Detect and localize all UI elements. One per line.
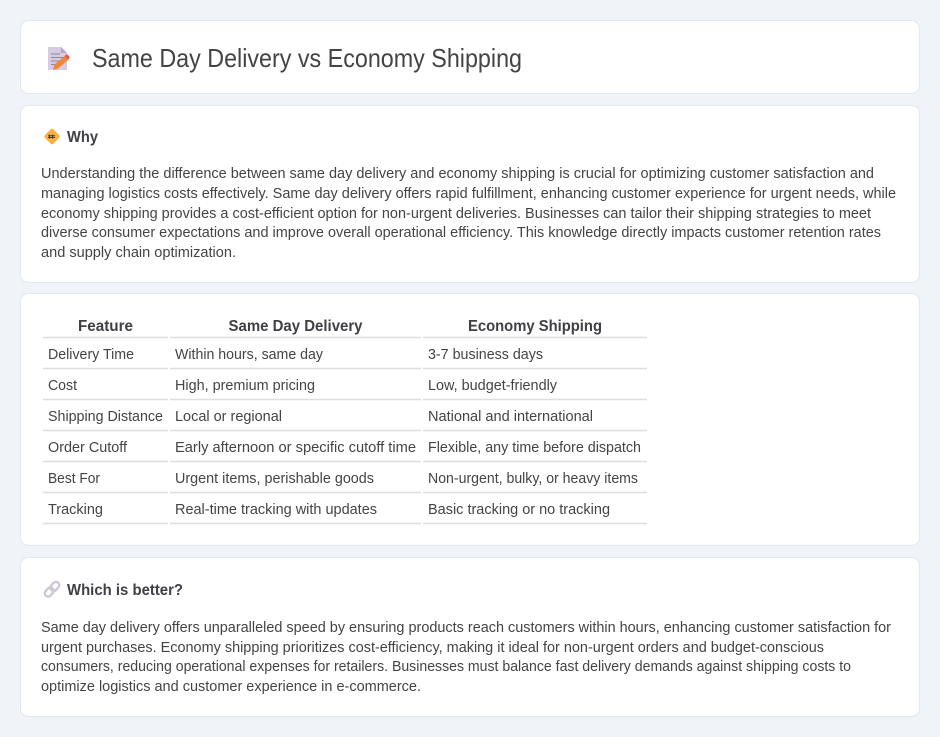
heading: why: Why <box>67 129 98 146</box>
text: why paragraph: managing logistics costs effectively. Same day delivery offers rapid fulfillment, enhancing customer experience for urgent needs, while <box>41 186 896 202</box>
table header: Same Day Delivery <box>228 318 363 335</box>
row: delivery time <box>48 347 543 363</box>
row: shipping distance: Local or regional <box>175 409 282 425</box>
row: best for: Best For <box>48 471 100 487</box>
table header <box>78 318 602 335</box>
panel: why <box>20 106 920 282</box>
row: tracking: Basic tracking or no tracking <box>428 502 610 518</box>
row: best for: Urgent items, perishable goods <box>175 471 374 487</box>
row: cost: High, premium pricing <box>175 378 315 394</box>
text: why paragraph: Understanding the difference between same day delivery and economy shipping is crucial for optimizing customer satisfaction and <box>41 166 874 182</box>
text: why paragraph <box>41 166 896 261</box>
row: cost: Cost <box>48 378 77 394</box>
panel: comparison table <box>20 294 920 546</box>
icon: memo with pencil <box>48 47 70 70</box>
panel: header <box>20 20 920 94</box>
heading: which is better: Which is better? <box>67 582 183 599</box>
row: order cutoff: Flexible, any time before dispatch <box>428 440 641 456</box>
text: which is better paragraph <box>41 620 891 695</box>
row: delivery time: Delivery Time <box>48 347 134 363</box>
title: Same Day Delivery vs Economy Shipping <box>92 45 522 73</box>
row: best for: Non-urgent, bulky, or heavy items <box>428 471 638 487</box>
row: shipping distance <box>48 409 593 425</box>
row: delivery time: 3-7 business days <box>428 347 543 363</box>
text: which is better paragraph: consumers, reducing operational expenses for retailers. Businesses must balance fast delivery demands against shipping costs to <box>41 659 851 675</box>
text: why paragraph: economy shipping provides a cost-efficient option for non-urgent deliveries. Businesses can tailor their shipping strategies to meet <box>41 206 871 222</box>
row: shipping distance: Shipping Distance <box>48 409 163 425</box>
table header: Economy Shipping <box>468 318 602 335</box>
icon: warning diamond <box>44 128 60 145</box>
row: tracking: Real-time tracking with updates <box>175 502 377 518</box>
row: order cutoff: Early afternoon or specific cutoff time <box>175 440 416 456</box>
icon: link <box>43 581 61 598</box>
row: tracking <box>48 502 610 518</box>
panel: which is better <box>20 558 920 716</box>
row: shipping distance: National and international <box>428 409 593 425</box>
row: cost <box>48 378 558 394</box>
text: which is better paragraph: urgent purchases. Economy shipping prioritizes cost-efficiency, making it ideal for non-urgent orders and budget-conscious <box>41 640 824 656</box>
table header: Feature <box>78 318 133 335</box>
row: order cutoff: Order Cutoff <box>48 440 128 456</box>
text: why paragraph: and supply chain optimization. <box>41 245 236 261</box>
row: delivery time: Within hours, same day <box>175 347 324 363</box>
row: best for <box>48 471 638 487</box>
text: which is better paragraph: optimize logistics and customer experience in e-commerce. <box>41 679 421 695</box>
text: which is better paragraph: Same day delivery offers unparalleled speed by ensuring products reach customers within hours, enhancing customer satisfaction for <box>41 620 891 636</box>
row: cost: Low, budget-friendly <box>428 378 558 394</box>
row: order cutoff <box>48 440 641 456</box>
text: why paragraph: diverse consumer expectations and improve overall operational efficiency. This knowledge directly impacts customer retention rates <box>41 225 881 241</box>
row: tracking: Tracking <box>48 502 103 518</box>
